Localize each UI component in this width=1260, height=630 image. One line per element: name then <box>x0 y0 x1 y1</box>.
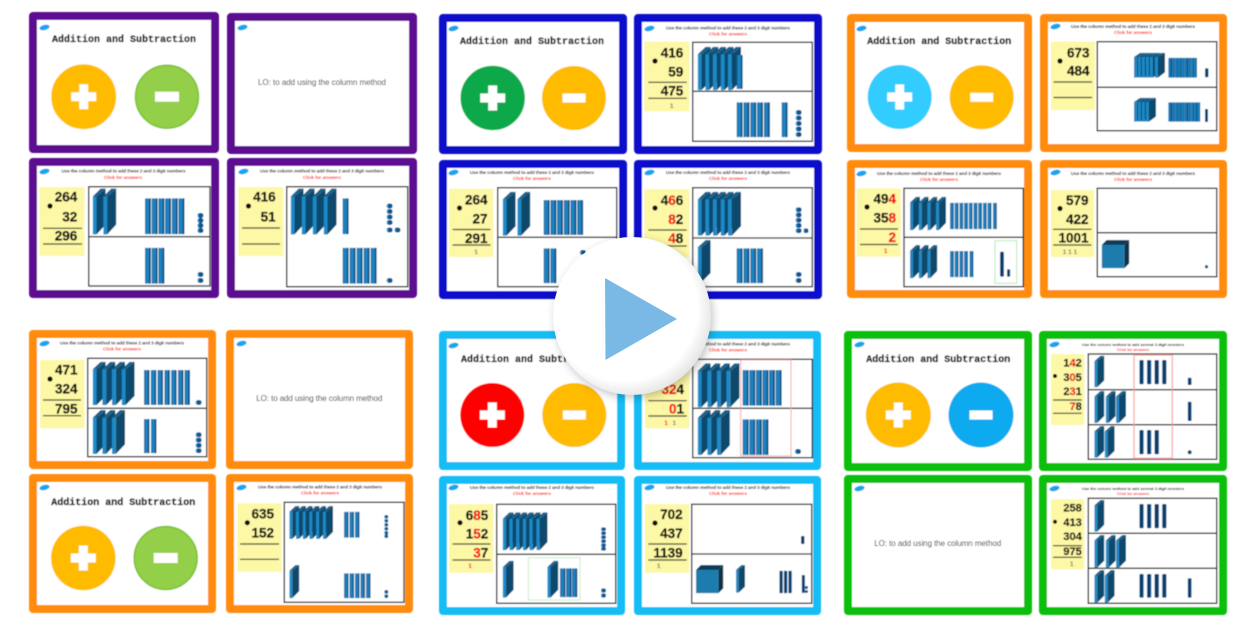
frame <box>33 334 212 465</box>
column sum: 416 <box>253 190 276 205</box>
learning objective text: LO: to add using the column method <box>256 394 382 403</box>
icon: logo <box>39 484 50 491</box>
column sum: 1139 <box>653 546 683 560</box>
column sum: 685 <box>466 508 489 523</box>
instruction: Use the column method to add these 2 and 3 digit numbers <box>258 484 382 490</box>
frame <box>1044 18 1223 148</box>
place value chart <box>1097 42 1217 131</box>
answer prompt: Click for answers <box>1117 491 1149 496</box>
slide: green sum 142 + 305 + 231 <box>1043 335 1223 467</box>
column sum: 78 <box>1069 401 1082 413</box>
instruction: Use the column method to add these 2 and 3 digit numbers <box>60 340 184 346</box>
title: Addition and Subtraction <box>52 34 196 46</box>
column sum <box>449 504 493 573</box>
column sum: 231 <box>1063 386 1082 398</box>
column sum: 264 <box>465 192 488 208</box>
column sum: 324 <box>661 382 684 397</box>
slide: blue sum 416 + 59 <box>638 18 818 150</box>
slide: orange sum 579 + 422 <box>1044 164 1223 294</box>
instruction: Use the column method to add several 3 digit numbers <box>1082 342 1184 347</box>
column sum: 1 <box>670 103 674 110</box>
answer prompt: Click for answers <box>1114 30 1152 35</box>
place value chart <box>1088 354 1217 459</box>
place value chart <box>1088 498 1217 603</box>
column sum: 27 <box>472 212 488 226</box>
column sum: 471 <box>55 362 78 378</box>
slide: blue title <box>443 18 623 150</box>
icon: play triangle <box>605 278 677 360</box>
column sum: 1 <box>657 563 661 570</box>
instruction: Use the column method to add these 2 and 3 digit numbers <box>666 342 790 346</box>
column sum: 51 <box>261 210 276 225</box>
slide: cyan sum with 324 <box>638 335 817 466</box>
column sum <box>39 187 84 256</box>
icon: logo <box>854 485 865 492</box>
icon: logo <box>448 25 459 32</box>
icon: logo <box>448 342 459 349</box>
answer prompt: Click for answers <box>513 176 551 181</box>
answer prompt: Click for answers <box>1114 177 1152 182</box>
slide: cyan title <box>443 335 621 466</box>
slide: orange sum 494 + 358 <box>851 164 1028 294</box>
column sum: 1 <box>1070 561 1074 568</box>
icon: plus circle <box>51 526 116 590</box>
slide: orange sum 673 + 484 <box>1044 18 1223 148</box>
column sum: 305 <box>1063 372 1082 384</box>
column sum: 142 <box>1063 358 1082 370</box>
icon: logo <box>236 484 247 491</box>
column sum: 673 <box>1067 46 1090 60</box>
icon: logo <box>856 170 867 177</box>
frame <box>443 164 623 295</box>
column sum <box>1051 354 1084 425</box>
answer prompt: Click for answers <box>1117 347 1149 352</box>
icon: logo <box>1050 23 1061 30</box>
title: Addition and Subtraction <box>867 36 1011 48</box>
column sum <box>645 359 689 428</box>
slide: orange title lower <box>33 478 212 609</box>
instruction: Use the column method to add these 2 and 3 digit numbers <box>877 171 1001 176</box>
column sum <box>1051 190 1094 257</box>
place value chart <box>693 359 812 458</box>
title: Addition and Subtraction <box>460 36 604 48</box>
column sum: 1 <box>664 420 668 427</box>
column sum: 494 <box>873 192 896 206</box>
column sum <box>238 187 283 256</box>
play button <box>553 237 712 397</box>
column sum: 32 <box>62 210 77 225</box>
column sum: 437 <box>660 526 683 541</box>
icon: plus circle <box>52 65 116 129</box>
column sum: 324 <box>55 382 78 396</box>
column sum <box>645 504 689 573</box>
column sum <box>644 42 689 111</box>
place value chart <box>904 188 1023 287</box>
icon: logo <box>448 484 459 491</box>
column sum <box>644 189 689 257</box>
slide: purple sum 264 + 32 <box>33 162 215 294</box>
instruction: Use the column method to add these 2 and 3 digit numbers <box>1071 171 1195 176</box>
column sum: 484 <box>1067 64 1090 78</box>
column sum: 152 <box>251 525 274 540</box>
icon: logo <box>238 168 249 175</box>
frame <box>443 480 621 611</box>
column sum: 702 <box>660 507 683 522</box>
frame <box>230 334 409 465</box>
column sum <box>1051 499 1084 569</box>
icon: minus circle <box>134 526 197 590</box>
column sum <box>857 188 901 257</box>
column sum <box>237 503 282 572</box>
frame <box>1044 164 1223 294</box>
column sum: 413 <box>1063 517 1082 529</box>
column sum: 264 <box>55 190 78 205</box>
column sum: 358 <box>873 210 896 226</box>
answer prompt: Click for answers <box>920 177 958 182</box>
column sum: 422 <box>1066 212 1088 227</box>
instruction: Use the column method to add these 2 and 3 digit numbers <box>1071 24 1195 29</box>
column sum: 01 <box>669 401 684 416</box>
frame <box>638 335 817 466</box>
icon: logo <box>236 340 247 347</box>
answer prompt: Click for answers <box>103 346 141 352</box>
icon: minus circle <box>950 65 1014 129</box>
column sum: 416 <box>661 45 684 60</box>
answer prompt: Click for answers <box>104 175 142 180</box>
frame <box>443 335 621 466</box>
icon: minus circle <box>948 382 1014 448</box>
icon: logo <box>854 341 865 348</box>
slide: cyan sum 702 + 437 <box>638 480 817 611</box>
frame <box>851 164 1028 294</box>
instruction: Use the column method to add these 2 and 3 digit numbers <box>666 26 790 30</box>
column sum: 1 <box>468 563 472 570</box>
icon: logo <box>39 168 50 175</box>
icon: logo <box>39 340 50 347</box>
title: Addition and Subtraction <box>461 354 605 366</box>
icon: logo <box>856 25 867 32</box>
icon: logo <box>644 169 655 176</box>
answer prompt: Click for answers <box>301 490 339 496</box>
learning objective text: LO: to add using the column method <box>874 539 1001 548</box>
icon: logo <box>644 25 655 32</box>
frame <box>1043 479 1223 611</box>
icon: logo <box>1049 341 1060 348</box>
column sum: 48 <box>668 231 684 246</box>
place value chart <box>1097 188 1217 277</box>
slide: orange sum 635 + 152 <box>230 478 409 609</box>
slide: orange learning objective <box>230 334 409 465</box>
frame <box>638 164 818 295</box>
slide: orange sum 471 + 324 <box>33 334 212 465</box>
slide: blue sum 466 + 82 <box>638 164 818 295</box>
icon: logo <box>39 24 50 31</box>
column sum: 37 <box>473 546 488 560</box>
column sum <box>449 189 493 257</box>
title: Addition and Subtraction <box>51 497 195 509</box>
column sum: 475 <box>661 84 684 99</box>
place value chart <box>287 187 408 287</box>
place value chart <box>693 188 812 287</box>
column sum: 304 <box>1063 531 1083 543</box>
icon: logo <box>448 169 459 176</box>
frame <box>230 478 409 609</box>
slide: green learning objective <box>848 479 1028 611</box>
frame <box>848 479 1028 611</box>
column sum <box>40 360 84 428</box>
frame <box>848 335 1028 467</box>
column sum: 2 <box>888 230 896 245</box>
column sum: 635 <box>251 506 274 521</box>
place value chart <box>284 502 404 602</box>
column sum <box>1051 42 1095 110</box>
place value chart <box>497 504 616 603</box>
place value chart <box>693 42 812 141</box>
column sum: 1 1 1 <box>1063 249 1078 256</box>
icon: logo <box>237 24 248 31</box>
frame <box>1043 335 1223 467</box>
column sum: 579 <box>1066 193 1088 208</box>
column sum: 152 <box>466 526 488 542</box>
instruction: Use the column method to add these 2 and 3 digit numbers <box>470 485 594 490</box>
learning objective text: LO: to add using the column method <box>258 78 386 87</box>
slide: green title <box>848 335 1028 467</box>
frame <box>231 17 413 150</box>
slide: purple title <box>33 16 215 149</box>
icon: plus circle <box>866 382 931 448</box>
column sum: 59 <box>668 65 683 80</box>
answer prompt: Click for answers <box>513 491 551 496</box>
frame <box>231 162 413 294</box>
place value chart <box>89 187 210 286</box>
column sum: 466 <box>661 193 684 208</box>
slide: blue sum 264 + 27 <box>443 164 623 295</box>
frame <box>851 18 1028 148</box>
icon: plus circle <box>461 66 524 130</box>
column sum: 975 <box>1063 546 1082 558</box>
instruction: Use the column method to add these 2 and 3 digit numbers <box>62 168 186 174</box>
column sum: 291 <box>465 231 488 246</box>
answer prompt: Click for answers <box>303 175 341 180</box>
frame <box>33 16 215 149</box>
answer prompt: Click for answers <box>709 32 747 36</box>
frame <box>33 478 212 609</box>
place value chart <box>88 358 207 457</box>
answer prompt: Click for answers <box>709 348 747 352</box>
icon: logo <box>1050 169 1061 176</box>
icon: plus circle <box>460 383 524 447</box>
place value chart <box>498 188 617 287</box>
instruction: Use the column method to add these 2 and 3 digit numbers <box>260 168 384 174</box>
column sum: 1 <box>672 420 676 427</box>
frame <box>33 162 215 294</box>
slide: purple learning objective <box>231 17 413 150</box>
frame <box>638 480 817 611</box>
icon: minus circle <box>136 65 198 128</box>
icon: minus circle <box>542 66 606 130</box>
column sum: 1001 <box>1058 230 1089 246</box>
slide: cyan sum 685 + 152 <box>443 480 621 611</box>
instruction: Use the column method to add these 2 and 3 digit numbers <box>666 485 790 490</box>
instruction: Use the column method to add these 2 and 3 digit numbers <box>666 170 790 175</box>
icon: minus circle <box>542 383 606 447</box>
column sum: 1 <box>884 248 888 255</box>
answer prompt: Click for answers <box>709 491 747 496</box>
instruction: Use the column method to add these 2 and 3 digit numbers <box>470 170 594 175</box>
frame <box>443 18 623 150</box>
icon: plus circle <box>868 65 932 129</box>
icon: logo <box>1049 485 1060 492</box>
place value chart <box>692 504 812 603</box>
instruction: Use the column method to add several 3 digit numbers <box>1082 486 1184 491</box>
title: Addition and Subtraction <box>866 354 1010 366</box>
slide: orange title <box>851 18 1028 148</box>
column sum: 1 <box>474 249 478 256</box>
column sum: 258 <box>1063 503 1082 515</box>
frame <box>638 18 818 150</box>
answer prompt: Click for answers <box>709 176 747 181</box>
column sum: 82 <box>668 212 683 227</box>
slide: green sum 258 + 413 + 304 <box>1043 479 1223 611</box>
slide: purple sum 416 + 51 <box>231 162 413 294</box>
column sum: 296 <box>55 229 78 244</box>
icon: logo <box>644 484 655 491</box>
column sum: 795 <box>55 402 78 416</box>
